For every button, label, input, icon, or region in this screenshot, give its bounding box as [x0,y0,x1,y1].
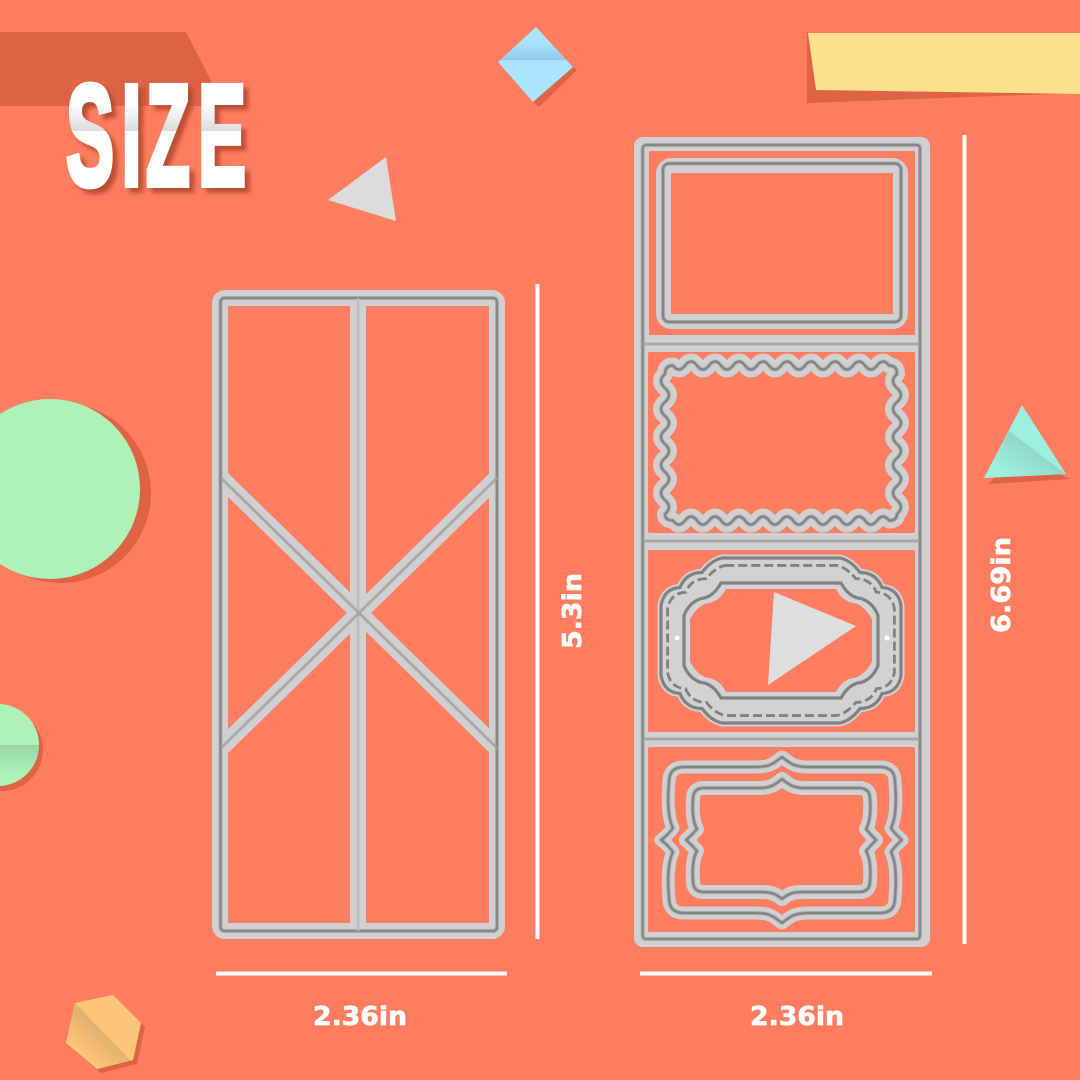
right die width line [640,972,932,976]
panel: bracket frames [661,757,902,923]
panel: scalloped frame [661,362,901,524]
right die height label: 6.69in [987,537,1017,633]
left die width label: 2.36in [313,1002,407,1032]
left die height line [536,284,540,939]
icon: blue folded diamond [498,27,577,107]
right die height line [962,135,966,944]
icon: grey triangle [328,157,396,221]
left cutting die [220,298,497,931]
icon: orange hexagon [66,995,145,1073]
icon: grey play triangle [768,592,856,685]
die body with four panels [634,137,930,947]
icon: large green circle [0,399,151,583]
right cutting die [634,137,930,947]
right die width label: 2.36in [750,1002,844,1032]
icon: teal triangle [984,405,1070,484]
panel: stitched label frame [661,558,901,723]
panel: rectangle frame [663,164,901,322]
icon: small green circle [0,704,43,791]
left die width line [216,972,507,976]
title: SIZE [66,56,246,217]
left die height label: 5.3in [558,573,588,649]
icon: yellow paper strip [807,33,1080,103]
title banner [0,32,224,106]
